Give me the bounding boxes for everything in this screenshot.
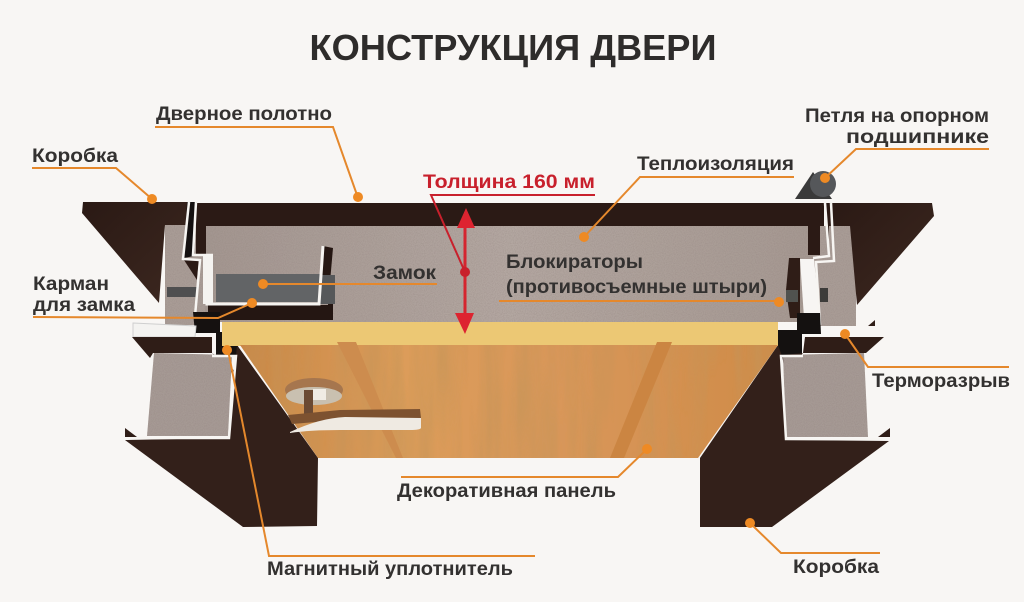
callout: Декоративная панель: [397, 444, 652, 502]
right door profile: [778, 203, 834, 356]
panel: lower right insulation: [783, 353, 868, 437]
title: КОНСТРУКЦИЯ ДВЕРИ: [310, 27, 716, 68]
panel: decorative door panel: [240, 345, 778, 458]
panel grooves: [337, 342, 672, 458]
panel: lower left frame: [125, 345, 318, 527]
panel: lower left insulation: [147, 353, 232, 436]
callout: Магнитный уплотнитель: Магнитный уплотнитель: [267, 559, 513, 580]
panel: right frame flap: [825, 203, 934, 305]
panel: lower right frame top: [782, 337, 884, 372]
callout: Дверное полотно: [155, 104, 363, 202]
callout: Теплоизоляция: [579, 154, 794, 242]
panel: top right door sheet return: [808, 226, 820, 255]
lower right frame lining: [781, 356, 882, 439]
callout: Петля на опорном подшипнике: Петля на опорном: [805, 106, 989, 127]
callout: thickness dimension: [423, 172, 595, 334]
callout: Теплоизоляция: Теплоизоляция: [637, 154, 794, 175]
callout: Терморазрыв: Терморазрыв: [872, 371, 1010, 392]
left door profile: [183, 202, 238, 356]
callout: Коробка bottom right: Коробка: [793, 557, 879, 578]
panel: left profile gap: [184, 202, 197, 258]
callout: Карман для замка: Карман: [33, 274, 109, 295]
callout: Карман для замка: для замка: [33, 295, 135, 316]
icon: hinge bearing: [795, 171, 836, 199]
icon: right corner triangles: [868, 320, 890, 437]
callout: Дверное полотно: Дверное полотно: [156, 104, 332, 125]
callout: Декоративная панель: Декоративная панель: [397, 481, 616, 502]
panel: right wall insulation: [815, 226, 856, 326]
panel: top door sheet: [196, 203, 824, 255]
icon: door handle: [285, 378, 421, 433]
callout: Блокираторы: (противосъемные штыри): [506, 277, 767, 298]
panel: main insulation: [205, 225, 817, 322]
panel: left frame flap: [82, 202, 190, 303]
panel: lower left frame top: [132, 337, 240, 375]
callout: Блокираторы: [499, 252, 784, 307]
callout: Коробка top left: Коробка: [32, 146, 118, 167]
callout: Коробка bottom right: [745, 518, 880, 578]
lock pocket with lock: [167, 246, 335, 320]
callout: Терморазрыв: [840, 329, 1010, 392]
lower left frame lining: [126, 356, 236, 438]
icon: left corner triangle: [125, 428, 137, 437]
callout: Петля на опорном подшипнике: [805, 106, 989, 183]
panel: lower right frame: [700, 345, 889, 527]
door cross-section diagram: [82, 171, 934, 527]
callout: Коробка top left: [32, 146, 157, 204]
panel: left wall insulation: [165, 225, 205, 325]
callout: thickness dimension: Толщина 160 мм: [423, 172, 595, 193]
panel: left white thermal break: [133, 323, 196, 337]
callout: Карман для замка: [33, 274, 257, 318]
panel: door leaf edge: [222, 322, 778, 346]
callout: Замок: Замок: [373, 263, 437, 284]
callout: Петля на опорном подшипнике: подшипнике: [846, 127, 989, 148]
callout: Замок: [258, 263, 437, 289]
callout: Блокираторы: Блокираторы: [506, 252, 643, 273]
callout: Магнитный уплотнитель: [222, 345, 535, 580]
